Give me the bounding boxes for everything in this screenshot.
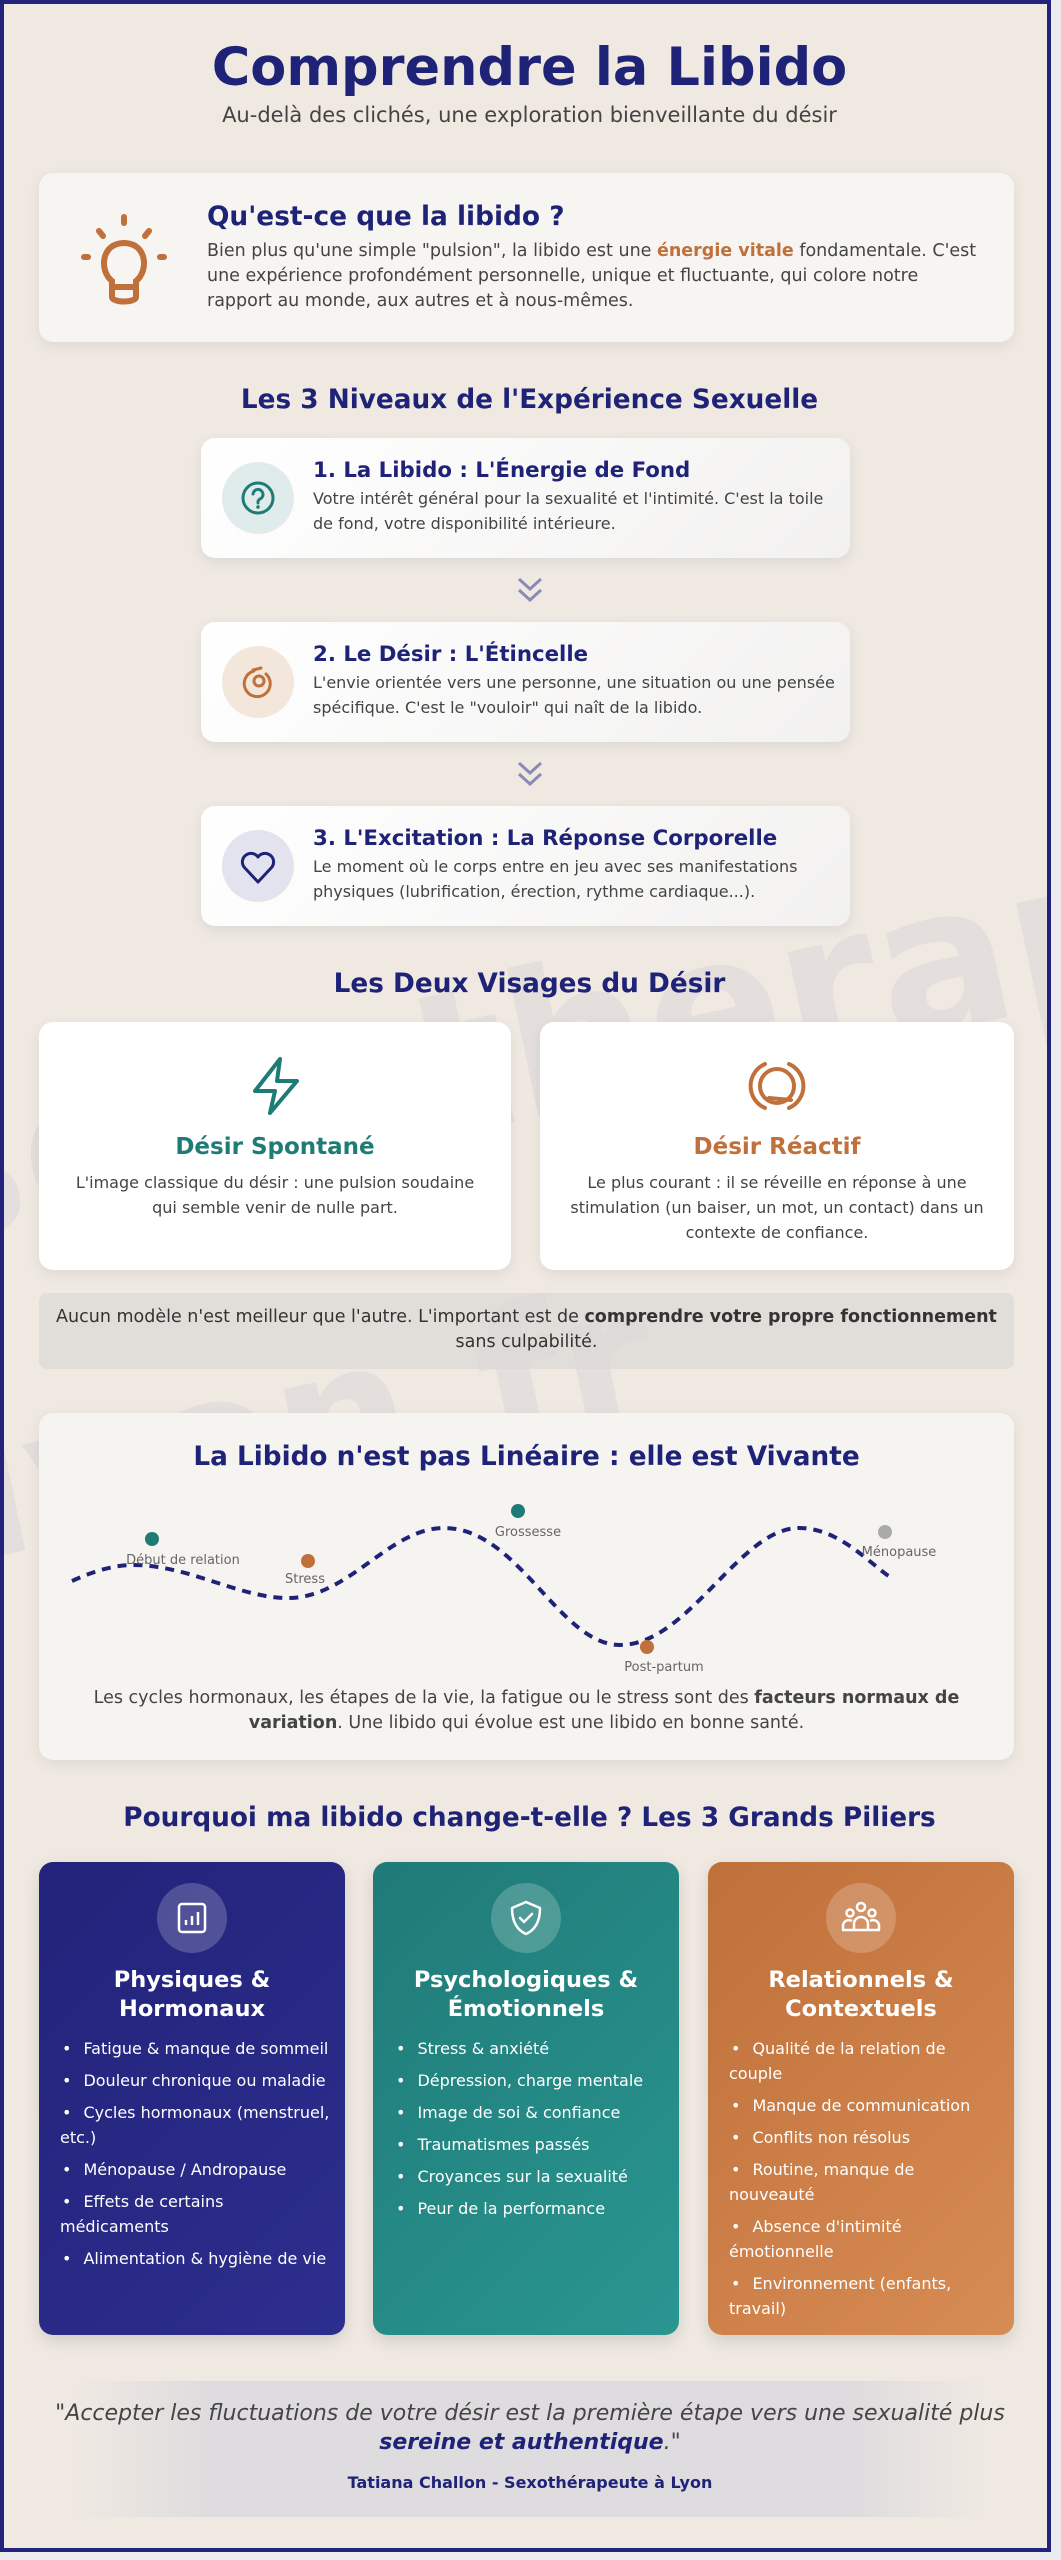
heading: Qu'est-ce que la libido ? (207, 201, 565, 232)
card: désir spontané: Désir Spontané (175, 1134, 375, 1160)
pillar: relationnels: Manque de communication (752, 2096, 970, 2115)
note box (39, 1293, 1014, 1369)
icon: question (222, 462, 294, 534)
pillar: psychologiques: Psychologiques & (414, 1967, 638, 1993)
card: désir réactif (540, 1022, 1014, 1270)
icon: heart (222, 830, 294, 902)
card: désir spontané (39, 1022, 511, 1270)
chart: wave: Grossesse (495, 1525, 561, 1540)
text: Les cycles hormonaux, les étapes de la vie, la fatigue ou le stress sont des facteurs normaux de variation. Une libido qui évolue est une libido en bonne santé. (94, 1688, 959, 1733)
pillar: physiques: Douleur chronique ou maladie (83, 2071, 326, 2090)
pillar: physiques: Effets de certains médicaments (60, 2192, 223, 2236)
heading: 3 niveaux: Les 3 Niveaux de l'Expérience Sexuelle (241, 385, 818, 415)
level 2: 2. Le Désir : L'Étincelle (313, 642, 588, 667)
heading: La Libido n'est pas Linéaire : elle est Vivante (193, 1442, 860, 1472)
pillar: relationnels: Contextuels (785, 1996, 937, 2022)
quote (74, 2381, 986, 2517)
pillar: relationnels (708, 1862, 1014, 2335)
icon: people (826, 1883, 896, 1953)
icon: lightbulb (81, 214, 167, 304)
chart: wave: Stress (285, 1572, 325, 1587)
pillar: psychologiques: Peur de la performance (417, 2199, 605, 2218)
heading: piliers: Pourquoi ma libido change-t-elle ? Les 3 Grands Piliers (123, 1803, 936, 1833)
pillar: relationnels: Environnement (enfants, travail) (729, 2274, 951, 2318)
panel: libido vivante (39, 1413, 1014, 1760)
level 3: Le moment où le corps entre en jeu avec ses manifestations physiques (lubrification, érection, rythme cardiaque...). (313, 857, 797, 901)
pillar: relationnels: Relationnels & (768, 1967, 954, 1993)
chart: wave: Post-partum (624, 1660, 704, 1675)
pillar: relationnels: Qualité de la relation de couple (729, 2039, 946, 2083)
icon: chart (157, 1883, 227, 1953)
level 2 (201, 622, 850, 742)
chart: wave: Ménopause (862, 1545, 936, 1560)
chart: wave: Début de relation (126, 1553, 240, 1568)
pillar: psychologiques: Image de soi & confiance (417, 2103, 620, 2122)
pillar: relationnels: Absence d'intimité émotionnelle (729, 2217, 902, 2261)
icon: cycle (748, 1062, 806, 1110)
pillar: psychologiques (373, 1862, 679, 2335)
pillar: psychologiques: Dépression, charge mentale (417, 2071, 643, 2090)
text: Bien plus qu'une simple "pulsion", la libido est une énergie vitale fondamentale. C'est une expérience profondément personnelle, unique et fluctuante, qui colore notre rapport au monde, aux autres et à nous-mêmes. (207, 241, 976, 311)
icon: spiral (222, 646, 294, 718)
chart: wave (71, 1504, 936, 1675)
pillar: relationnels: Routine, manque de nouveauté (729, 2160, 914, 2204)
pillar: physiques: Hormonaux (119, 1996, 265, 2022)
card: désir réactif: Désir Réactif (694, 1134, 860, 1160)
pillar: psychologiques: Stress & anxiété (417, 2039, 549, 2058)
title: Comprendre la Libido (212, 37, 847, 98)
arrow (518, 578, 542, 602)
level 1: 1. La Libido : L'Énergie de Fond (313, 458, 690, 483)
level 3 (201, 806, 850, 926)
card: désir spontané: L'image classique du désir : une pulsion soudaine qui semble venir de nulle part. (76, 1173, 474, 1217)
pillar: physiques: Fatigue & manque de sommeil (83, 2039, 328, 2058)
level 1 (201, 438, 850, 558)
pillar: psychologiques: Traumatismes passés (417, 2135, 590, 2154)
pillar: relationnels: Conflits non résolus (752, 2128, 910, 2147)
pillar: physiques (39, 1862, 345, 2335)
panel: qu'est-ce que la libido (39, 173, 1014, 342)
card: désir réactif: Le plus courant : il se réveille en réponse à une stimulation (un baiser, un mot, un contact) dans un contexte de confiance. (570, 1173, 984, 1242)
heading: deux visages: Les Deux Visages du Désir (334, 969, 725, 999)
pillar: physiques: Physiques & (114, 1967, 270, 1993)
pillar: physiques: Ménopause / Andropause (83, 2160, 286, 2179)
quote: "Accepter les fluctuations de votre désir est la première étape vers une sexualité plus sereine et authentique." (55, 2401, 1005, 2455)
pillar: psychologiques: Émotionnels (448, 1996, 604, 2022)
level 1: Votre intérêt général pour la sexualité et l'intimité. C'est la toile de fond, votre disponibilité intérieure. (313, 489, 823, 533)
pillar: physiques: Cycles hormonaux (menstruel, etc.) (60, 2103, 329, 2147)
author: Tatiana Challon - Sexothérapeute à Lyon (348, 2473, 712, 2492)
note box: Aucun modèle n'est meilleur que l'autre. L'important est de comprendre votre propre fonctionnement sans culpabilité. (56, 1307, 997, 1352)
subtitle: Au-delà des clichés, une exploration bienveillante du désir (222, 103, 837, 127)
icon: shield (491, 1883, 561, 1953)
level 3: 3. L'Excitation : La Réponse Corporelle (313, 826, 777, 851)
icon: lightning (252, 1057, 300, 1115)
arrow (518, 762, 542, 786)
pillar: physiques: Alimentation & hygiène de vie (83, 2249, 326, 2268)
pillar: psychologiques: Croyances sur la sexualité (417, 2167, 628, 2186)
level 2: L'envie orientée vers une personne, une situation ou une pensée spécifique. C'est le "vouloir" qui naît de la libido. (313, 673, 835, 717)
